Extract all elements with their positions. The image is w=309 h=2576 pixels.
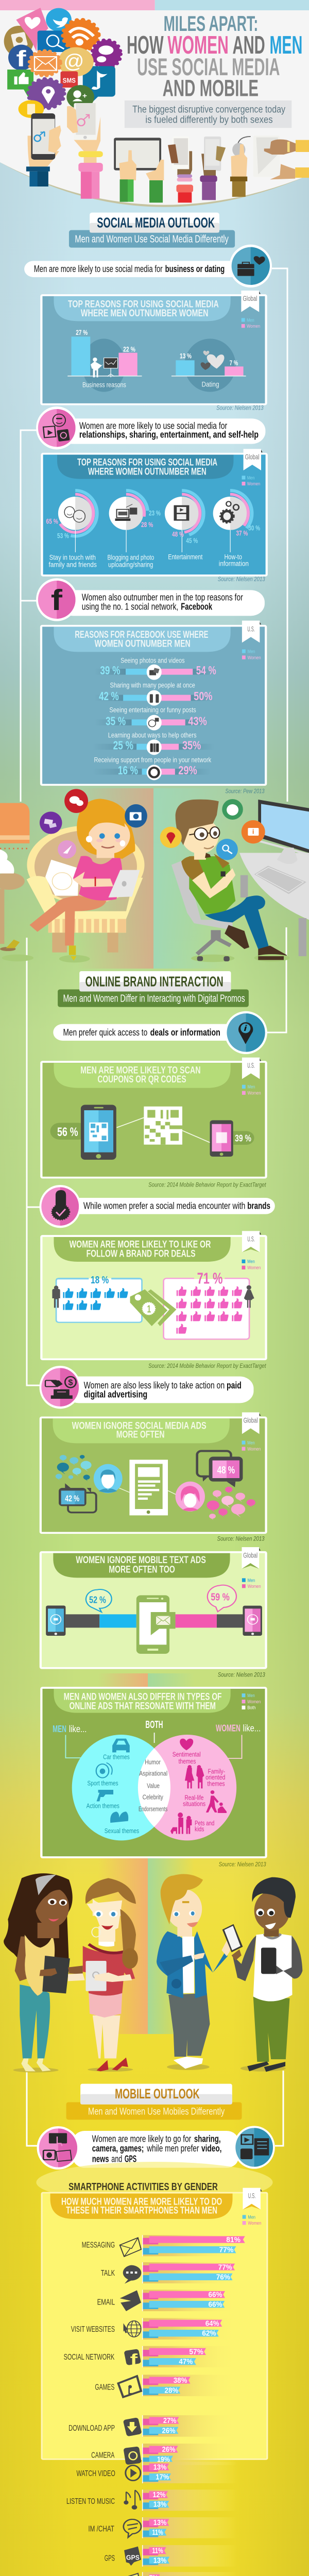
row: seeing photos and videos: Seeing photos and videos	[121, 656, 185, 665]
source: Source: Nielsen 2013	[219, 1860, 266, 1868]
callout: women sharing, men video: news	[92, 2154, 109, 2164]
row: games: GAMES	[95, 2382, 114, 2392]
header background	[0, 0, 309, 207]
legend	[242, 318, 260, 329]
row: GPS: 11%	[152, 2547, 163, 2555]
panel: men scan QR: COUPONS OR QR CODES	[97, 1074, 186, 1085]
callout: men business or dating: Men are more likely to use social media for	[34, 264, 163, 275]
row: receiving support	[93, 756, 212, 780]
legend: Men	[247, 1440, 255, 1446]
donut: entertainment	[160, 490, 203, 561]
legend: Men	[248, 2215, 255, 2220]
tablet with ad	[119, 1460, 176, 1515]
value: women 39%: 39 %	[235, 1133, 251, 1144]
venn labels: MEN	[53, 1724, 66, 1735]
row: seeing photos and videos: 39 %	[100, 664, 121, 677]
row: GPS: 13%	[153, 2556, 166, 2565]
donut: entertainment: 48 %	[172, 530, 184, 538]
panel: top reasons women outnumber men	[42, 449, 267, 575]
row: camera: 26%	[162, 2446, 176, 2454]
donut: stay in touch: 65 %	[46, 517, 58, 526]
ribbon: global: Global	[243, 1551, 258, 1560]
panel: women ignore social media ads	[41, 1412, 266, 1533]
panel: men scan QR	[41, 1058, 266, 1178]
ribbon: U.S.: U.S.	[247, 1235, 255, 1243]
donut: stay in touch	[46, 490, 97, 569]
callout: women paid digital advertising	[40, 1366, 253, 1409]
men bubbles	[56, 1455, 92, 1481]
donut: blogging: 28 %	[141, 521, 153, 529]
women themes: Pets and	[195, 1820, 214, 1827]
icon: QR code	[117, 1107, 210, 1145]
row: messaging: 77%	[219, 2246, 233, 2254]
legend	[242, 1693, 261, 1710]
ribbon: global: Global	[245, 453, 260, 461]
row: learning about ways to help: 35%	[182, 739, 201, 752]
venn labels: like...	[69, 1724, 87, 1735]
row: sharing with many people: Sharing with many people at once	[110, 682, 195, 689]
legend: Men	[247, 1259, 255, 1264]
row: read newspapers	[61, 2572, 237, 2576]
panel: reasons for facebook use	[41, 621, 266, 785]
illustration: man in blue hoodie	[157, 1874, 243, 2070]
source: Source: Nielsen 2013	[218, 1671, 265, 1678]
row: social network: f	[130, 2350, 138, 2368]
connector lines	[21, 268, 287, 2146]
center glow	[36, 2162, 273, 2203]
source: Source: Nielsen 2013	[216, 404, 264, 411]
callout: women paid digital advertising: Women are also less likely to take action on	[84, 1380, 225, 1391]
callout: women facebook	[36, 578, 265, 621]
panel: top reasons men outnumber women: TOP REASONS FOR USING SOCIAL MEDIA	[68, 299, 219, 310]
callout: women facebook: Facebook	[181, 602, 213, 612]
legend	[242, 1259, 261, 1270]
men themes: Car themes	[103, 1754, 130, 1761]
donut: stay in touch: family and friends	[49, 561, 97, 569]
illustration: lamp and side table	[0, 803, 29, 951]
row: visit websites	[71, 2318, 237, 2340]
row: games: 28%	[165, 2386, 178, 2395]
callout: men deals	[53, 1011, 267, 1054]
chart: women 71%: 71 %	[197, 1269, 222, 1287]
callout: women relationships: Women are more likely to use social media for	[79, 421, 227, 431]
donut: how-to information	[209, 490, 260, 568]
ribbon: U.S.: U.S.	[247, 625, 255, 633]
row: visit websites: 62%	[202, 2330, 216, 2337]
row: GPS: GPS	[126, 2554, 140, 2562]
section heading: online brand interaction	[58, 971, 249, 1007]
both themes: Value	[147, 1782, 160, 1790]
legend: Men	[248, 1084, 255, 1090]
men avatar	[94, 1464, 123, 1493]
legend: Women	[248, 2221, 261, 2226]
source: Source: Pew 2013	[225, 787, 265, 794]
men themes: Sport themes	[88, 1780, 118, 1787]
row: learning about ways to help: Learning about ways to help others	[108, 731, 197, 739]
women themes: Real-life	[185, 1794, 203, 1802]
chart: women 71%	[164, 1269, 254, 1339]
legend: Men	[247, 476, 254, 481]
ribbon: global	[242, 1412, 261, 1434]
row: messaging	[82, 2235, 245, 2257]
icon: phone with QR, men	[81, 1105, 116, 1160]
icon cluster: social media: f	[16, 46, 26, 71]
donut: blogging	[105, 490, 161, 569]
ribbon: global: Global	[243, 295, 257, 303]
row: messaging: MESSAGING	[82, 2240, 115, 2249]
ribbon: global	[241, 291, 261, 312]
row: learning about ways to help: 25 %	[113, 739, 133, 752]
row: email: 66%	[208, 2291, 222, 2299]
panel: top reasons men outnumber women: WHERE MEN OUTNUMBER WOMEN	[81, 308, 208, 319]
row: camera: 19%	[157, 2455, 170, 2464]
both themes: Celebrity	[143, 1793, 163, 1801]
legend: Women	[248, 1091, 261, 1096]
donut: stay in touch: 53 %	[57, 532, 69, 540]
bar chart: business reasons: Business reasons	[82, 381, 126, 389]
women themes: Family-	[208, 1768, 225, 1775]
both themes: Humor	[145, 1759, 161, 1766]
callout: men deals: Men prefer quick access to	[63, 1027, 147, 1038]
row: receiving support: Receiving support from people in your network	[94, 756, 212, 764]
phone: women	[243, 1606, 262, 1636]
legend	[242, 1440, 261, 1452]
row: sharing with many people	[95, 682, 214, 706]
panel: women ignore mobile text ads	[41, 1547, 266, 1668]
hand on mouse	[230, 137, 251, 197]
ribbon: global: Global	[244, 1416, 258, 1425]
phone with message	[136, 1595, 176, 1654]
value bubble: men 52%	[86, 1589, 112, 1612]
row: listen to music: LISTEN TO MUSIC	[66, 2496, 115, 2506]
legend	[242, 1578, 261, 1589]
women themes: kids	[195, 1826, 204, 1833]
row: receiving support: 16 %	[118, 764, 138, 777]
icons around man	[160, 799, 265, 860]
subtitle box	[125, 100, 291, 128]
legend: Men	[248, 1578, 255, 1583]
donut: how-to information: information	[219, 560, 249, 568]
callout: men deals: i	[244, 1023, 248, 1033]
row: IM chat	[88, 2517, 237, 2538]
row: camera: CAMERA	[91, 2450, 115, 2460]
legend: Men	[248, 649, 255, 654]
chart: men 18%	[52, 1274, 142, 1323]
panel: women like or follow: WOMEN ARE MORE LIKELY TO LIKE OR	[70, 1239, 211, 1250]
callout: women brands: brands	[247, 1201, 270, 1211]
panel: smartphone activities by gender: THESE IN THEIR SMARTPHONES THAN MEN	[66, 2205, 217, 2216]
row: GPS: GPS	[105, 2553, 115, 2563]
donut: entertainment: Entertainment	[168, 553, 203, 561]
row: watch video: 17%	[156, 2473, 169, 2481]
row: download app: DOWNLOAD APP	[68, 2423, 115, 2433]
row: talk: TALK	[101, 2268, 115, 2278]
callout: women relationships	[36, 406, 265, 449]
donut: entertainment: 45 %	[186, 537, 198, 545]
bar chart: business reasons	[67, 329, 142, 392]
men themes: Sexual themes	[105, 1827, 139, 1835]
callout: women sharing, men video: while men prefer	[146, 2143, 199, 2154]
both themes: Aspirational	[139, 1770, 167, 1777]
legend	[242, 476, 260, 487]
icon cluster: social media: @	[63, 50, 84, 72]
callout: women paid digital advertising: digital advertising	[84, 1389, 147, 1400]
row: listen to music: 12%	[153, 2491, 165, 2499]
panel: women ignore mobile text ads: WOMEN IGNORE MOBILE TEXT ADS	[76, 1554, 206, 1566]
value bubble: men 52%: 52 %	[89, 1595, 106, 1605]
row: entertaining posts: 35 %	[106, 715, 126, 728]
panel: women ignore social media ads: WOMEN IGNORE SOCIAL MEDIA ADS	[72, 1420, 207, 1431]
row: listen to music: 13%	[153, 2501, 166, 2509]
row: IM chat: 13%	[153, 2519, 166, 2527]
ribbon: U.S.	[243, 2188, 262, 2210]
row: learning about ways to help	[93, 731, 214, 755]
ribbon: U.S.	[242, 621, 261, 642]
donut: blogging: 23 %	[149, 510, 161, 517]
row: email: 66%	[208, 2301, 222, 2309]
bar: men and women ignoring text ads	[65, 1614, 244, 1628]
row: download app: 26%	[162, 2427, 176, 2435]
panel: reasons for facebook use: WOMEN OUTNUMBER MEN	[95, 638, 191, 649]
bar chart: dating	[171, 338, 246, 392]
row: watch video	[76, 2462, 237, 2483]
panel: women ignore social media ads: MORE OFTEN	[116, 1429, 165, 1440]
row: games: 38%	[174, 2377, 187, 2385]
row: messaging: 81%	[226, 2236, 241, 2244]
callout: women sharing, men video: camera, games;	[92, 2143, 144, 2154]
bar chart: dating: Dating	[201, 381, 219, 388]
panel: online ad themes venn: ONLINE ADS THAT RESONATE WITH THEM	[70, 1701, 216, 1711]
row: watch video: WATCH VIDEO	[76, 2468, 115, 2478]
phone: men	[46, 1605, 65, 1636]
legend: Men	[247, 318, 254, 323]
row: sharing with many people: 42 %	[99, 690, 119, 703]
row: social network: 57%	[189, 2348, 203, 2356]
legend: Women	[247, 1700, 261, 1705]
row: games	[95, 2375, 237, 2397]
callout: women sharing, men video: Women are more likely to go for	[92, 2134, 191, 2144]
ribbon: U.S.	[242, 1058, 261, 1079]
row: entertaining posts: Seeing entertaining or funny posts	[109, 706, 196, 714]
legend	[243, 2215, 261, 2226]
title: HOW	[127, 31, 164, 59]
hands on tablet	[253, 135, 309, 179]
panel: smartphone activities by gender	[42, 2188, 267, 2465]
legend: Women	[247, 1265, 261, 1270]
panel: top reasons women outnumber men: WHERE WOMEN OUTNUMBER MEN	[88, 466, 207, 477]
panel: reasons for facebook use: REASONS FOR FACEBOOK USE WHERE	[75, 629, 209, 640]
row: social network	[64, 2346, 237, 2368]
women themes: themes	[208, 1780, 225, 1788]
donut: stay in touch: Stay in touch with	[49, 553, 96, 562]
donut: how-to information: 30 %	[248, 524, 260, 532]
row: entertaining posts	[95, 706, 209, 731]
row: visit websites: 64%	[205, 2319, 219, 2328]
value bubble: women 48%	[197, 1451, 243, 1487]
title: WOMEN	[167, 31, 229, 59]
ribbon: U.S.	[242, 1231, 261, 1252]
row: sharing with many people: 50%	[194, 690, 213, 703]
callout: women sharing, men video: and	[111, 2154, 122, 2164]
bar chart: business reasons: 22 %	[123, 345, 135, 353]
ribbon: global	[242, 1547, 261, 1569]
men themes	[87, 1739, 139, 1835]
illustration: woman with white tablet	[68, 1878, 138, 2072]
icons around woman	[40, 789, 147, 858]
row: receiving support: 29%	[178, 764, 197, 777]
chart: men 18%: 18 %	[91, 1274, 109, 1286]
hand with phone: woman	[67, 103, 103, 199]
icon: price tag	[130, 1290, 176, 1326]
callout: men business or dating	[24, 245, 272, 287]
value: women 39%	[233, 1131, 254, 1145]
row: social network: 47%	[179, 2358, 193, 2366]
women avatar	[176, 1482, 205, 1512]
value bubble: men 42%	[59, 1483, 96, 1513]
ground shadows	[2, 954, 289, 962]
section heading: mobile outlook	[66, 2084, 242, 2120]
row: camera	[91, 2444, 237, 2465]
section heading: social media outlook	[69, 213, 235, 248]
ribbon: global	[244, 449, 263, 470]
value bubble: women 59%: 59 %	[211, 1591, 230, 1603]
row: email: EMAIL	[97, 2297, 115, 2307]
illustration: man in white shirt	[232, 1877, 302, 2072]
panel: women ignore mobile text ads: MORE OFTEN TOO	[109, 1564, 175, 1575]
women themes: themes	[179, 1758, 196, 1766]
row: IM chat: IM /CHAT	[88, 2523, 114, 2533]
men themes: Action themes	[87, 1803, 119, 1810]
donut: how-to information: 37 %	[236, 530, 248, 537]
legend	[242, 649, 261, 660]
legend	[242, 1084, 261, 1096]
callout: women facebook: f	[51, 584, 63, 616]
hand with phone: man	[26, 113, 61, 187]
row: visit websites: VISIT WEBSITES	[71, 2324, 115, 2334]
callout: men deals: deals or information	[150, 1027, 220, 1038]
both themes: Endorsements	[139, 1806, 167, 1813]
legend: Women	[247, 482, 260, 487]
row: GPS	[105, 2545, 237, 2567]
venn labels: WOMEN	[216, 1723, 241, 1734]
hands with tablet	[114, 138, 164, 202]
legend: Women	[247, 1447, 261, 1452]
callout: men business or dating: business or dating	[165, 264, 225, 275]
legend: Women	[247, 324, 260, 329]
legend: Men	[247, 1693, 255, 1699]
row: email	[97, 2290, 237, 2311]
illustration: woman with dark tablet	[4, 1873, 83, 2073]
venn labels: BOTH	[145, 1719, 163, 1731]
bar chart: dating: 13 %	[180, 352, 192, 360]
value: men 56%	[50, 1123, 88, 1140]
legend: Women	[248, 655, 261, 660]
callout: women paid digital advertising: paid	[227, 1380, 242, 1391]
value bubble: men 42%: 42 %	[65, 1494, 79, 1503]
panel: top reasons men outnumber women	[41, 291, 266, 404]
legend: Both	[247, 1705, 255, 1710]
section heading: social media outlook: SOCIAL MEDIA OUTLOOK	[97, 215, 215, 231]
icon cluster: social media	[4, 8, 121, 122]
row: talk	[101, 2262, 237, 2284]
panel: online ad themes venn	[41, 1688, 266, 1857]
value: men 56%: 56 %	[57, 1126, 78, 1139]
panel heading: smartphone activities: SMARTPHONE ACTIVITIES BY GENDER	[68, 2180, 218, 2193]
icon: phone with QR, women	[210, 1120, 233, 1157]
source: Source: Nielsen 2013	[218, 575, 265, 583]
callout: women facebook: using the no. 1 social network,	[82, 602, 178, 612]
panel: men scan QR: MEN ARE MORE LIKELY TO SCAN	[80, 1065, 201, 1076]
callout: women brands	[40, 1185, 275, 1228]
bar chart: dating: 7 %	[230, 359, 238, 367]
row: seeing photos and videos: 54 %	[196, 664, 216, 677]
venn labels	[53, 1719, 261, 1758]
row: listen to music	[66, 2489, 237, 2511]
row: talk: 76%	[216, 2273, 230, 2281]
row: watch video: 13%	[153, 2463, 166, 2471]
callout: women sharing, men video: GPS	[125, 2154, 136, 2164]
icons around man: i	[252, 828, 254, 836]
venn diagram	[72, 1735, 236, 1840]
title: AND	[233, 31, 265, 59]
panel: women like or follow: FOLLOW A BRAND FOR DEALS	[87, 1248, 196, 1259]
women themes: situations	[183, 1800, 205, 1808]
donut: blogging: uploading/sharing	[108, 561, 153, 569]
icon: price tag: 1	[147, 1303, 151, 1315]
title	[127, 11, 302, 101]
panel: top reasons women outnumber men: TOP REASONS FOR USING SOCIAL MEDIA	[77, 457, 217, 468]
section heading: mobile outlook: Men and Women Use Mobiles Differently	[88, 2106, 225, 2117]
row: entertaining posts: 43%	[188, 715, 207, 728]
hands with phones	[168, 137, 226, 202]
illustration: man at desk	[171, 800, 309, 956]
donut: how-to information: How-to	[224, 553, 242, 561]
callout: women sharing, men video: sharing,	[194, 2134, 221, 2144]
row: download app: 27%	[163, 2417, 176, 2425]
row: IM chat: 11%	[152, 2529, 163, 2537]
row: seeing photos and videos	[95, 656, 216, 680]
women bubbles	[207, 1487, 255, 1520]
value bubble: women 48%: 48 %	[217, 1464, 235, 1476]
ribbon: U.S.: U.S.	[248, 2192, 255, 2200]
icon cluster: social media: +	[82, 92, 87, 100]
row: talk: 77%	[218, 2263, 232, 2272]
women themes	[170, 1739, 227, 1834]
panel: women like or follow	[41, 1231, 266, 1359]
callout: women paid digital advertising: $	[68, 1378, 73, 1387]
callout: women sharing, men video	[37, 2126, 275, 2170]
icon cluster: social media: SMS	[63, 77, 76, 84]
both themes	[139, 1759, 167, 1813]
row: social network: SOCIAL NETWORK	[64, 2352, 115, 2362]
legend: Women	[248, 1584, 261, 1589]
callout: women sharing, men video: video,	[201, 2143, 221, 2154]
venn labels: like...	[243, 1723, 261, 1734]
section heading: mobile outlook: MOBILE OUTLOOK	[115, 2087, 200, 2102]
source: Source: Nielsen 2013	[217, 1535, 265, 1542]
row: download app	[68, 2415, 237, 2437]
donut: blogging: Blogging and photo	[108, 553, 154, 562]
women themes: oriented	[205, 1774, 225, 1782]
bar chart: business reasons: 27 %	[76, 329, 88, 337]
illustration: woman on armchair with tablet	[6, 799, 144, 955]
value bubble: women 59%	[208, 1585, 236, 1612]
ribbon: U.S.: U.S.	[247, 1062, 255, 1070]
women themes: Sentimental	[173, 1751, 201, 1758]
